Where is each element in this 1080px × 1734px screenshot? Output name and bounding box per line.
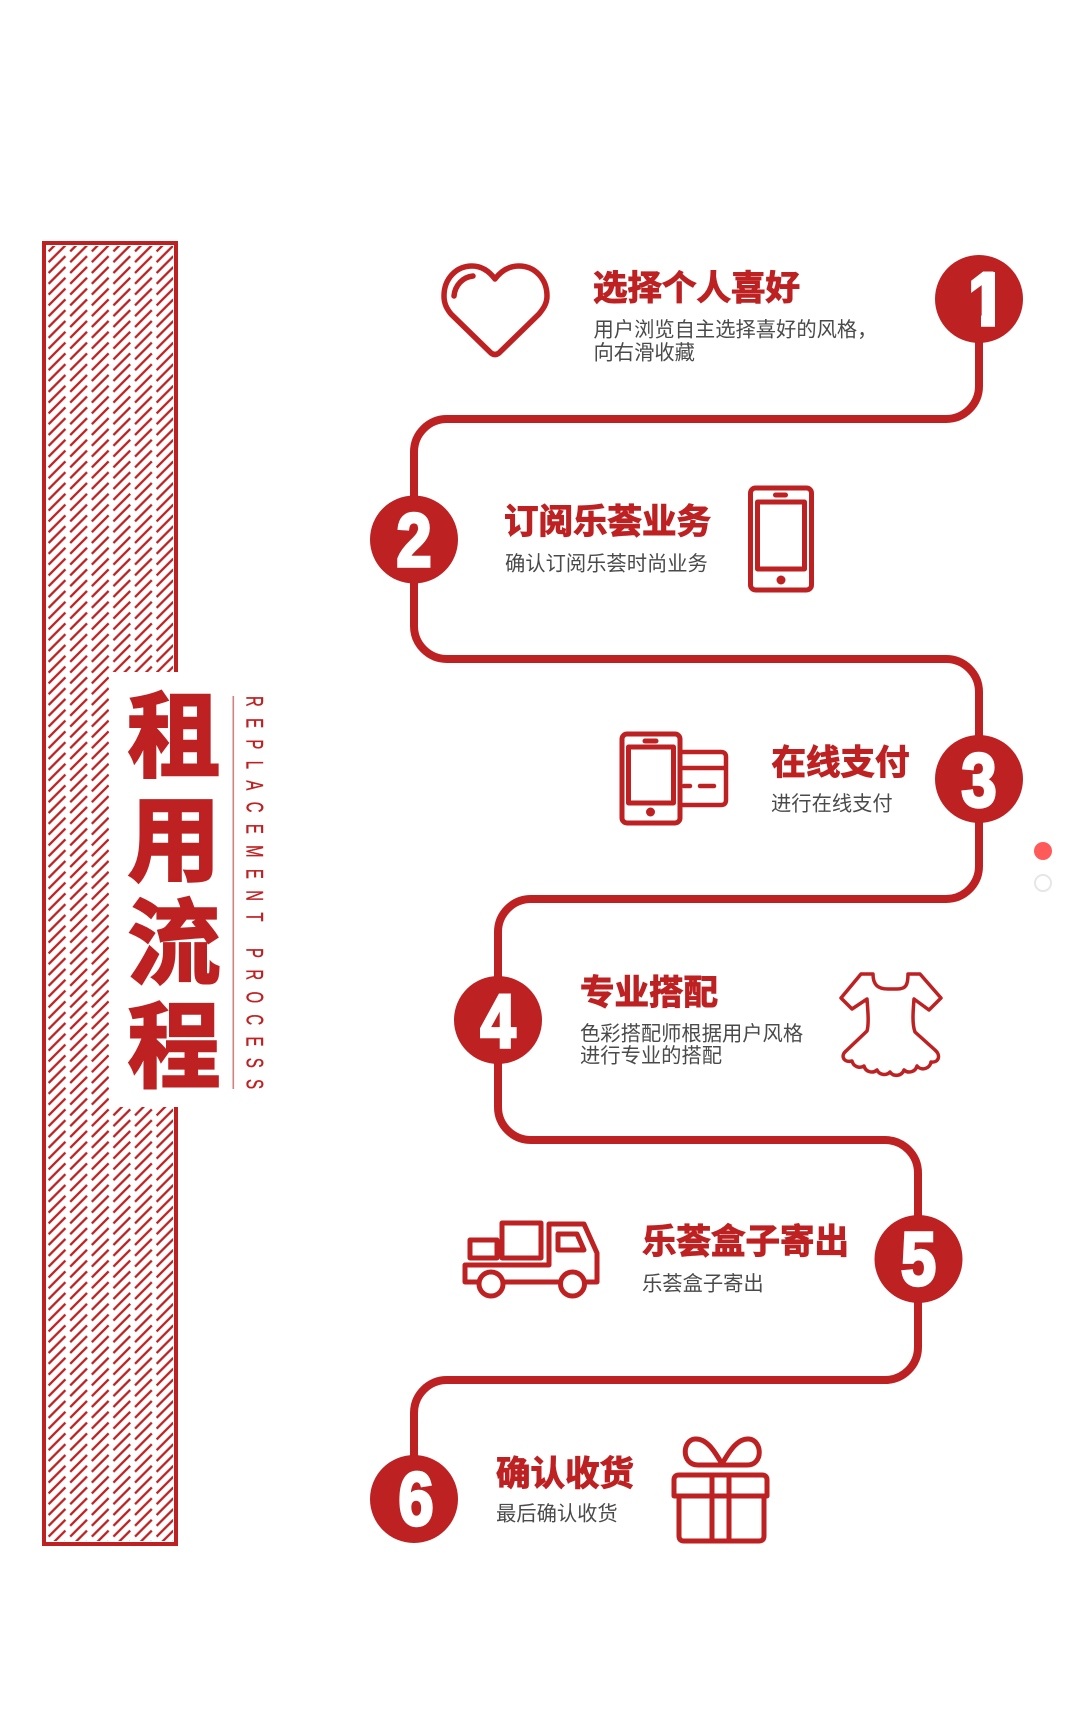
icon: truck (465, 1223, 597, 1296)
description: 向右滑收藏 (594, 342, 695, 364)
pagination dots (1034, 842, 1052, 891)
title: 租用流程 (128, 686, 220, 1100)
description (580, 1022, 803, 1068)
description: 确认订阅乐荟时尚业务 (505, 552, 708, 576)
step 4 (454, 974, 941, 1075)
icon: phone and card (622, 734, 726, 823)
description (594, 318, 877, 364)
heading: 专业搭配 (580, 974, 718, 1012)
number badge 1: 1 (968, 257, 1004, 341)
heading: 确认收货 (496, 1456, 634, 1494)
number badge 2 (370, 496, 458, 584)
description: 乐荟盒子寄出 (642, 1272, 764, 1296)
description: 最后确认收货 (496, 1502, 618, 1526)
number badge 5 (874, 1215, 962, 1303)
timeline path (414, 299, 979, 1499)
icon: heart (444, 266, 547, 354)
title: 租用流程: 用 (128, 790, 220, 894)
heading: 选择个人喜好 (593, 270, 800, 308)
subtitle: replacement process: REPLACEMENT PROCESS (240, 696, 267, 1089)
step 3 (622, 734, 1023, 823)
number badge 6: 6 (398, 1457, 434, 1541)
icon: phone (750, 488, 812, 590)
step 2 (370, 488, 812, 590)
number badge 1 (935, 255, 1023, 343)
icon: dress (841, 974, 941, 1075)
number badge 5: 5 (901, 1217, 936, 1301)
title: 租用流程: 流 (128, 892, 220, 996)
step 5 (465, 1215, 962, 1303)
description: 色彩搭配师根据用户风格 (580, 1022, 803, 1046)
number badge 3: 3 (961, 738, 997, 822)
number badge 3 (935, 735, 1023, 823)
step 1 (444, 255, 1023, 364)
description: 用户浏览自主选择喜好的风格， (594, 318, 877, 342)
divider line (232, 696, 234, 1089)
panel: hatched column (44, 243, 176, 1544)
icon: gift (674, 1439, 767, 1541)
number badge 2: 2 (396, 498, 432, 582)
description: 进行在线支付 (771, 792, 893, 816)
heading: 乐荟盒子寄出 (642, 1224, 849, 1262)
number badge 4 (454, 976, 542, 1064)
title: 租用流程: 程 (128, 996, 220, 1100)
number badge 4: 4 (480, 979, 516, 1063)
panel: title block (109, 672, 269, 1107)
title: 租用流程: 租 (128, 686, 220, 790)
number badge 6 (370, 1455, 458, 1543)
heading: 在线支付 (772, 744, 910, 782)
heading: 订阅乐荟业务 (504, 504, 711, 542)
description: 进行专业的搭配 (580, 1044, 722, 1068)
step 6 (370, 1439, 767, 1543)
